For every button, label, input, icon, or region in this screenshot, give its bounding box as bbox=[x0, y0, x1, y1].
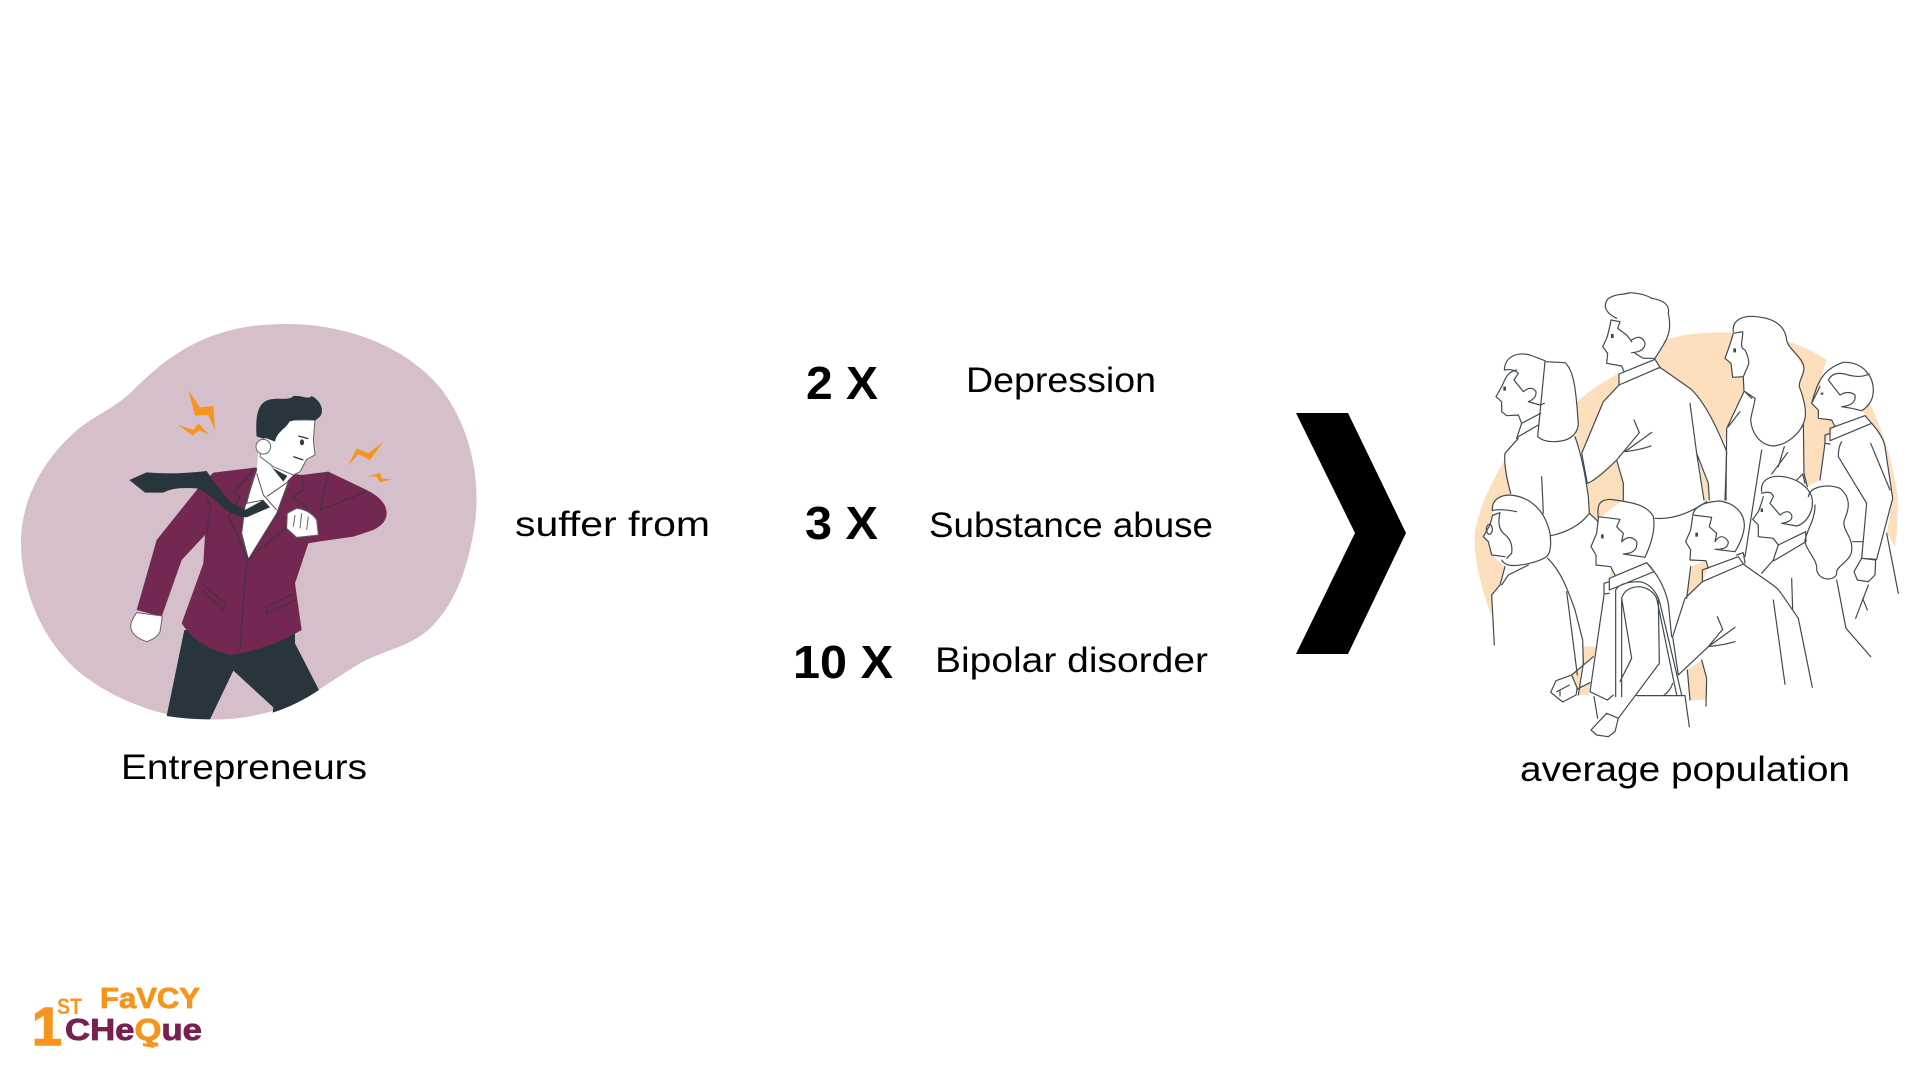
person: long hair woman bbox=[1725, 316, 1807, 557]
person: curly hair man bbox=[1582, 293, 1727, 518]
lightning bolts bbox=[178, 390, 392, 482]
condition: Bipolar disorder: Bipolar disorder bbox=[935, 641, 1208, 680]
multiplier: 10 X: 10 X bbox=[793, 636, 893, 688]
person: man front right bbox=[1673, 501, 1812, 706]
eyebrow and mouth bbox=[293, 436, 308, 460]
illustration: stressed entrepreneur bbox=[21, 324, 477, 719]
logo Cheque: CHeQue bbox=[65, 1012, 202, 1047]
logo underscore bbox=[143, 1043, 154, 1048]
person: older woman with glasses bbox=[1483, 495, 1593, 702]
glasses bbox=[1486, 524, 1492, 534]
multiplier: 3 X: 3 X bbox=[805, 497, 878, 549]
label: Entrepreneurs: Entrepreneurs bbox=[121, 748, 367, 787]
trousers bbox=[167, 630, 319, 719]
person: ponytail woman bbox=[1753, 476, 1871, 657]
logo: Favcy 1st Cheque bbox=[32, 983, 202, 1057]
jacket seams bbox=[202, 468, 367, 650]
collar lines bbox=[247, 473, 288, 510]
tie bbox=[129, 471, 270, 517]
logo ST: ST bbox=[57, 994, 82, 1019]
shirt bbox=[242, 460, 288, 559]
arrow: greater-than chevron bbox=[1296, 413, 1406, 654]
right fist bbox=[287, 508, 318, 537]
head bbox=[260, 420, 315, 475]
neck bbox=[255, 450, 293, 497]
hair bbox=[256, 396, 322, 442]
fist fingers bbox=[293, 513, 308, 530]
logo Favcy: FaVCY bbox=[100, 983, 200, 1015]
jacket bbox=[137, 468, 387, 655]
left fist bbox=[131, 613, 162, 642]
condition: Substance abuse: Substance abuse bbox=[929, 506, 1213, 545]
condition: Depression: Depression bbox=[966, 361, 1156, 400]
multiplier: 2 X: 2 X bbox=[806, 357, 878, 409]
ear bbox=[256, 439, 271, 454]
face detail bbox=[270, 439, 304, 482]
logo numeral 1: 1 bbox=[32, 997, 62, 1057]
person: right man bbox=[1812, 362, 1898, 618]
label: average population: average population bbox=[1520, 750, 1850, 789]
person: veiled woman bbox=[1496, 354, 1598, 536]
label: suffer from: suffer from bbox=[515, 505, 710, 544]
eyes bbox=[1503, 334, 1823, 538]
person: man with bag bbox=[1590, 499, 1689, 737]
mauve blob background bbox=[21, 324, 477, 719]
illustration: crowd of people bbox=[1475, 293, 1898, 737]
peach circle patches bbox=[1475, 332, 1898, 701]
